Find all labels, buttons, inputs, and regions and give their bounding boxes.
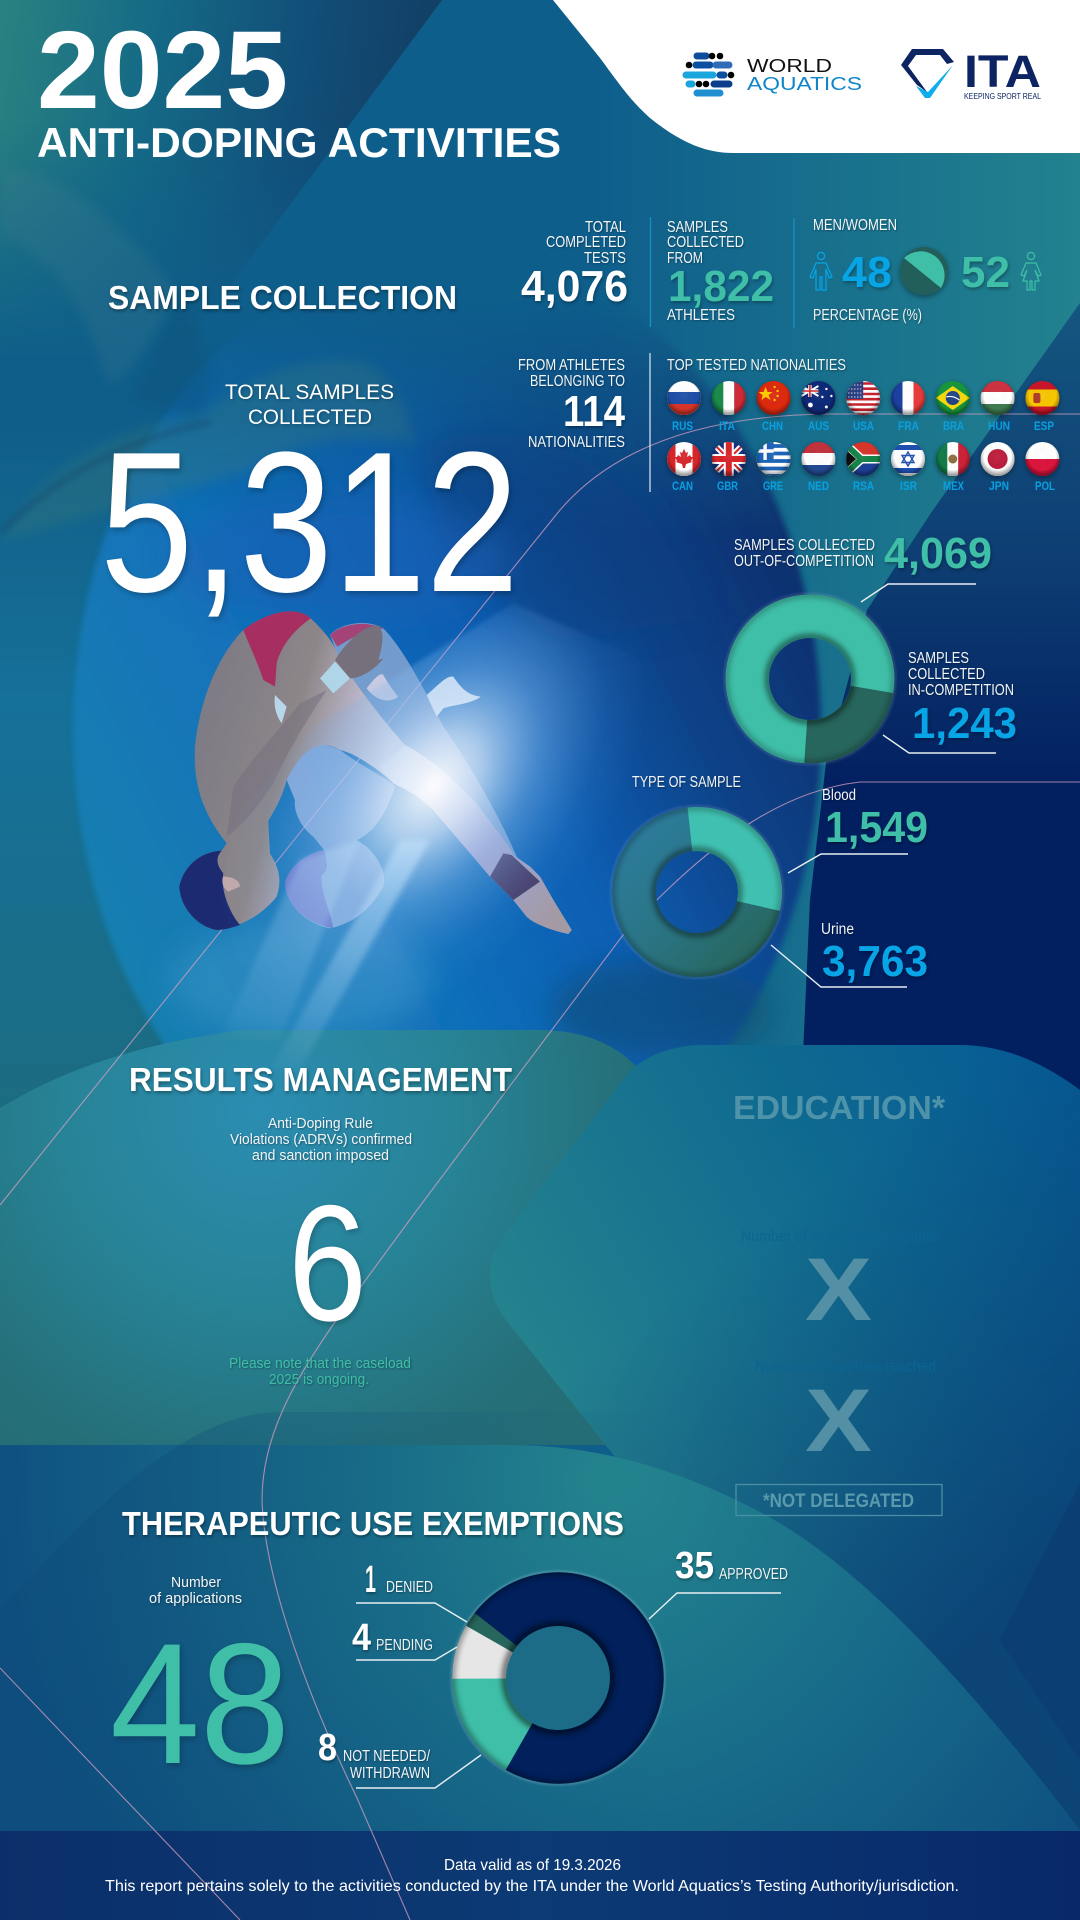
stat: athletes: 1,822 [668,262,774,311]
donut: sample type [611,806,783,978]
stat: number of applications: 48 [110,1608,290,1800]
note: caseload [229,1356,411,1388]
subtitle: ANTI-DOPING ACTIVITIES [37,119,561,166]
flag labels: RUS [672,419,693,433]
flag labels: GBR [717,479,738,493]
decorative pink lines [0,414,1080,1920]
flag labels: MEX [943,479,964,493]
text: ADRV description [230,1116,412,1164]
heading: sample collection: SAMPLE COLLECTION [108,279,457,316]
panel: therapeutic background [0,1412,1080,1920]
heading: therapeutic use exemptions: THERAPEUTIC USE EXEMPTIONS [122,1505,624,1542]
callout: not needed or withdrawn [318,1727,481,1788]
stat: in-competition: COLLECTED [908,666,985,683]
stat: ADRV count: 6 [288,1171,367,1355]
callout: approved: APPROVED [719,1566,788,1583]
stat: blood [788,787,928,873]
flag labels: CHN [762,419,783,433]
donut: competition split [724,594,896,764]
stat: total samples collected: COLLECTED [248,406,372,429]
flag labels [672,419,1055,493]
logo: ITA [901,46,1041,101]
stat: total samples collected: TOTAL SAMPLES [225,381,394,404]
divider [793,218,795,328]
stat: nationalities: 114 [563,387,625,436]
stat: nationalities: FROM ATHLETES [518,357,625,374]
title: 2025 [37,9,288,132]
panel: education: X [805,1370,872,1470]
stat: in-competition: SAMPLES [908,650,969,667]
callout: approved: 35 [675,1545,714,1587]
stat: urine: Urine [821,921,854,938]
flag labels: HUN [988,419,1010,433]
callout: pending: 4 [352,1617,371,1659]
light rays [220,840,430,1070]
stat: total completed tests: TESTS [584,250,626,267]
flag: Canada [667,442,701,476]
flag: China [757,381,791,415]
flag labels: FRA [898,419,919,433]
stat: out-of-competition: SAMPLES COLLECTED [734,537,875,554]
panel: top tested nationalities: TOP TESTED NATIONALITIES [667,357,846,374]
stat: total completed tests: COMPLETED [546,234,626,251]
flag: Netherlands [801,442,835,476]
label: type of sample: TYPE OF SAMPLE [632,774,741,791]
callout: not needed or withdrawn: 8 [318,1727,337,1769]
stat: number of applications: Number [171,1575,221,1591]
divider [649,353,651,492]
callout: denied: DENIED [386,1579,433,1596]
page background [0,0,1080,1457]
stat: men women percentage: MEN/WOMEN [813,217,897,234]
logo: ITA: ITA [964,46,1041,97]
stat: out-of-competition: 4,069 [884,529,992,578]
stat: athletes: ATHLETES [667,307,735,324]
pie: men women [900,247,948,295]
flag labels: RSA [853,479,874,493]
stat: number of applications: of applications [149,1591,242,1607]
stat: men women percentage [810,217,1041,324]
illustration: diver with reflection and light beam [167,603,767,1113]
flag: Australia [801,381,835,415]
stat: athletes [667,219,774,324]
stat: out-of-competition [734,529,992,602]
stat: total samples collected: 5,312 [100,411,519,634]
stat: men women percentage: 52 [961,248,1010,297]
panel: education background [490,1045,1080,1920]
stat: athletes: SAMPLES [667,219,728,236]
flag: Russia [667,381,701,415]
flag: USA [846,381,880,415]
callout: approved [649,1545,788,1619]
stat: out-of-competition: OUT-OF-COMPETITION [734,553,874,570]
panel: education [733,1089,945,1516]
panel: top tested nationalities [667,357,1059,493]
footer text: Data valid as of 19.3.2026 [444,1857,621,1874]
stat: total completed tests: 4,076 [521,262,628,311]
logo: World Aquatics [686,53,862,94]
stat: nationalities: NATIONALITIES [528,434,625,451]
flag labels: POL [1035,479,1055,493]
flag: Great Britain [712,442,746,476]
stat: total completed tests: TOTAL [585,219,626,236]
flag labels: GRE [763,479,783,493]
stat: in-competition [883,650,1017,753]
flag: Spain [1025,381,1059,415]
icon: man [810,252,832,290]
flag labels: AUS [808,419,829,433]
flag labels: ITA [719,419,735,433]
text: ADRV description: Anti-Doping Rule [268,1116,373,1132]
footer text: This report pertains solely to the activities conducted by the ITA under the World Aquatics’s Testing Authority/jurisdiction. [105,1878,959,1895]
flag: Italy [712,381,746,415]
stat: athletes: FROM [667,250,703,267]
callout: denied: 1 [365,1559,376,1601]
panel: education: X [805,1239,872,1339]
stat: urine [771,921,928,987]
stat: blood: 1,549 [825,803,928,852]
heading: results management: RESULTS MANAGEMENT [129,1061,512,1098]
panel: education: Number of webinar participants [741,1229,937,1245]
flag labels: NED [808,479,829,493]
flag labels: ESP [1034,419,1054,433]
stat: in-competition: 1,243 [912,699,1017,748]
flag: France [891,381,926,415]
flag labels: USA [853,419,874,433]
callout: pending: PENDING [376,1637,433,1654]
panel: education: EDUCATION* [733,1089,945,1126]
divider [650,217,652,327]
panel: education: Number of countries reached [755,1359,936,1375]
text: ADRV description: Violations (ADRVs) confirmed [230,1132,412,1148]
stat: nationalities [518,357,625,451]
logo: ITA: KEEPING SPORT REAL [964,91,1041,101]
flag labels: JPN [989,479,1009,493]
flag: Israel [891,442,925,476]
white logo corner [553,0,1080,153]
stat: men women percentage: 48 [842,248,892,297]
stat: men women percentage: PERCENTAGE (%) [813,307,922,324]
logo: World Aquatics: AQUATICS [747,74,862,94]
flag labels: CAN [672,479,693,493]
logo: World Aquatics: WORLD [747,56,832,76]
flag: Greece [757,442,791,476]
callout: not needed or withdrawn: NOT NEEDED/ [343,1748,431,1765]
note: caseload: Please note that the caseload [229,1356,411,1372]
flag labels: ISR [900,479,917,493]
icon: woman [1021,252,1041,290]
stat: nationalities: BELONGING TO [530,373,625,390]
stat: total completed tests [521,219,628,311]
text: ADRV description: and sanction imposed [252,1148,389,1164]
flag: Mexico [936,442,970,476]
panel: education: *NOT DELEGATED [763,1491,914,1512]
flag: Poland [1025,442,1059,476]
flag labels: BRA [943,419,964,433]
stat: blood: Blood [822,787,856,804]
stat: athletes: COLLECTED [667,234,744,251]
callout: pending [352,1617,457,1660]
footer band [0,1831,1080,1920]
note: caseload: 2025 is ongoing. [269,1372,369,1388]
flag: Japan [981,442,1015,476]
stat: urine: 3,763 [822,937,928,986]
panel: results background [0,960,770,1445]
callout: denied [356,1559,467,1622]
flag: Hungary [981,381,1015,415]
footer text [105,1857,959,1895]
callout: not needed or withdrawn: WITHDRAWN [350,1765,430,1782]
donut: TUE outcomes [447,1567,669,1789]
flag: Brazil [936,381,970,415]
title [37,9,561,166]
stat: in-competition: IN-COMPETITION [908,682,1014,699]
flag: South Africa [846,442,880,476]
